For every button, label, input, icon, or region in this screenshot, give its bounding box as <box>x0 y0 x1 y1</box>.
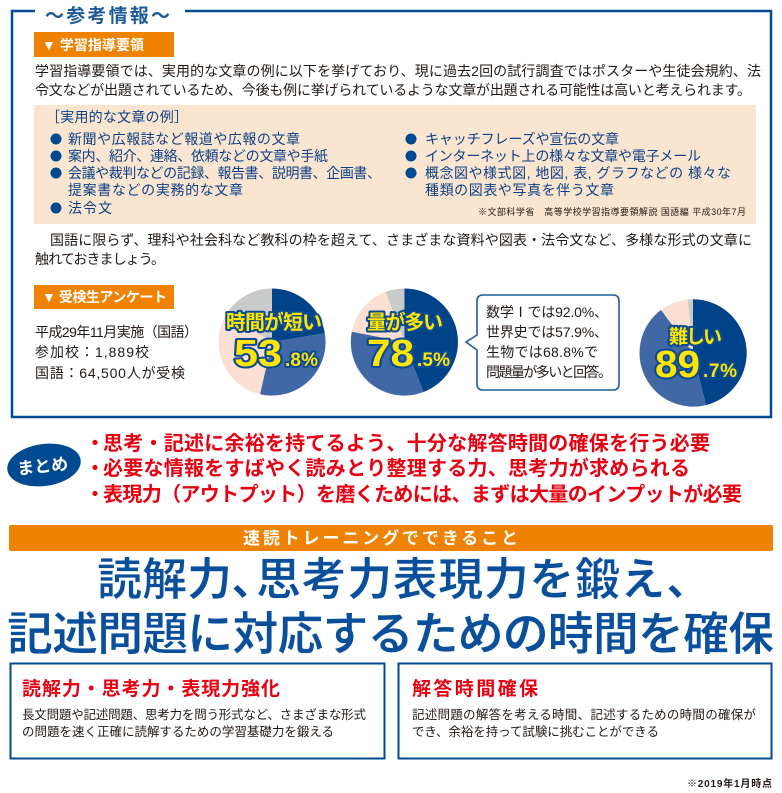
pie chart: too much volume 78.5% <box>351 288 458 396</box>
panel: reading and thinking skills: の問題を速く正確に読解するための学習基礎力を鍛える <box>22 724 334 739</box>
panel: practical text examples: キャッチフレーズや宣伝の文章 <box>425 131 619 147</box>
panel: practical text examples: 種類の図表や写真を伴う文章 <box>425 182 614 198</box>
text block: survey details <box>35 324 198 381</box>
pie chart: too much volume 78.5%: 量が多い <box>367 310 443 334</box>
summary points <box>85 431 742 506</box>
callout: subject results <box>466 295 619 390</box>
panel: reading and thinking skills: 読解力・思考力・表現力強化 <box>22 678 280 700</box>
panel: practical text examples: インターネット上の様々な文章や電子メール <box>425 148 701 164</box>
text block: advice: 触れておきましょう。 <box>35 251 165 267</box>
summary points: 表現力（アウトプット）を磨くためには、まずは大量のインプットが必要 <box>103 482 742 506</box>
pie chart: not enough time 53.8%: 53 <box>234 333 282 375</box>
panel: practical text examples: 新聞や広報誌など報道や広報の文章 <box>68 131 300 147</box>
callout: subject results: 数学Ⅰでは92.0%、 <box>486 304 608 320</box>
callout: subject results: 問題量が多いと回答。 <box>486 364 612 380</box>
pie chart: not enough time 53.8%: 時間が短い <box>226 310 322 334</box>
section label: examinee survey: ▼ 受検生アンケート <box>42 289 167 305</box>
panel: practical text examples: 概念図や様式図, 地図, 表, グラフなどの 様々な <box>425 165 731 181</box>
panel: practical text examples: 会議や裁判などの記録、報告書、説明書、企画書、 <box>68 165 381 181</box>
text block: advice: 国語に限らず、理科や社会科など教科の枠を超えて、さまざまな資料や図表・法令文など、多様な形式の文章に <box>50 232 752 248</box>
panel: securing answer time <box>398 664 772 758</box>
section label: curriculum guidelines <box>34 32 174 57</box>
summary points: ・ <box>85 458 105 480</box>
pie chart: difficult 89.7%: 89 <box>655 344 700 386</box>
badge: summary: まとめ <box>16 455 69 479</box>
panel: reading and thinking skills: 長文問題や記述問題、思考力を問う形式など、さまざまな形式 <box>22 707 366 722</box>
panel: securing answer time: 解答時間確保 <box>412 677 538 700</box>
text block: advice <box>35 232 752 267</box>
panel: practical text examples: 提案書などの実務的な文章 <box>68 182 243 198</box>
text block: survey details: 国語：64,500人が受検 <box>35 365 185 381</box>
text block: guidelines description: 学習指導要領では、実用的な文章の例に以下を挙げており、現に過去2回の試行調査ではポスターや生徒会規約、法 <box>35 63 761 79</box>
callout: subject results: 世界史では57.9%、 <box>486 324 608 340</box>
pie chart: too much volume 78.5%: .5% <box>417 350 450 371</box>
panel: securing answer time: 記述問題の解答を考える時間、記述するための時間の確保が <box>412 707 756 722</box>
summary points: 思考・記述に余裕を持てるよう、十分な解答時間の確保を行う必要 <box>103 431 710 455</box>
summary points: ・ <box>85 484 105 506</box>
summary points: 必要な情報をすばやく読みとり整理する力、思考力が求められる <box>103 456 690 480</box>
badge: summary <box>4 439 84 491</box>
main heading: 思考力表現力を鍛え、 <box>256 554 711 605</box>
panel: practical text examples: 案内、紹介、連絡、依頼などの文章や手紙 <box>68 148 328 164</box>
callout: subject results: 生物では68.8%で <box>486 344 598 360</box>
text block: guidelines description: 令文などが出題されているため、今後も例に挙げられているような文章が出題される可能性は高いと考えられます。 <box>35 82 751 98</box>
panel: practical text examples: ※文部科学省 高等学校学習指導要領解説 国語編 平成30年7月 <box>478 206 746 217</box>
heading: reference information: ～参考情報～ <box>45 5 170 27</box>
footnote: ※2019年1月時点 <box>687 777 772 790</box>
main heading <box>7 554 774 660</box>
section label: curriculum guidelines: ▼ 学習指導要領 <box>42 37 144 53</box>
pie chart: not enough time 53.8% <box>218 288 326 396</box>
panel: practical text examples: 法令文 <box>68 200 112 216</box>
pie chart: not enough time 53.8%: .8% <box>285 350 318 371</box>
text block: survey details: 参加校：1,889校 <box>35 344 149 360</box>
pie chart: difficult 89.7%: 難しい <box>669 326 722 348</box>
pie chart: difficult 89.7%: .7% <box>703 361 737 382</box>
text block: survey details: 平成29年11月実施（国語） <box>35 324 198 340</box>
main heading: 記述問題に対応するための時間を確保 <box>7 608 774 660</box>
panel: reading and thinking skills <box>10 664 384 758</box>
panel: practical text examples <box>34 105 756 224</box>
main heading: 読解力 <box>97 554 232 605</box>
panel: reference information <box>12 5 771 417</box>
panel: practical text examples: ［実用的な文章の例］ <box>46 109 188 125</box>
banner: what speed reading training can do <box>9 525 773 551</box>
panel: securing answer time: でき、余裕を持って試験に挑むことができる <box>412 724 659 739</box>
pie chart: too much volume 78.5%: 78 <box>367 333 414 375</box>
text block: guidelines description <box>35 63 761 98</box>
banner: what speed reading training can do: 速読トレーニングでできること <box>243 528 518 548</box>
summary points: ・ <box>85 433 105 455</box>
main heading: 、 <box>231 554 276 605</box>
section label: examinee survey <box>34 285 174 309</box>
pie chart: difficult 89.7% <box>639 299 747 407</box>
